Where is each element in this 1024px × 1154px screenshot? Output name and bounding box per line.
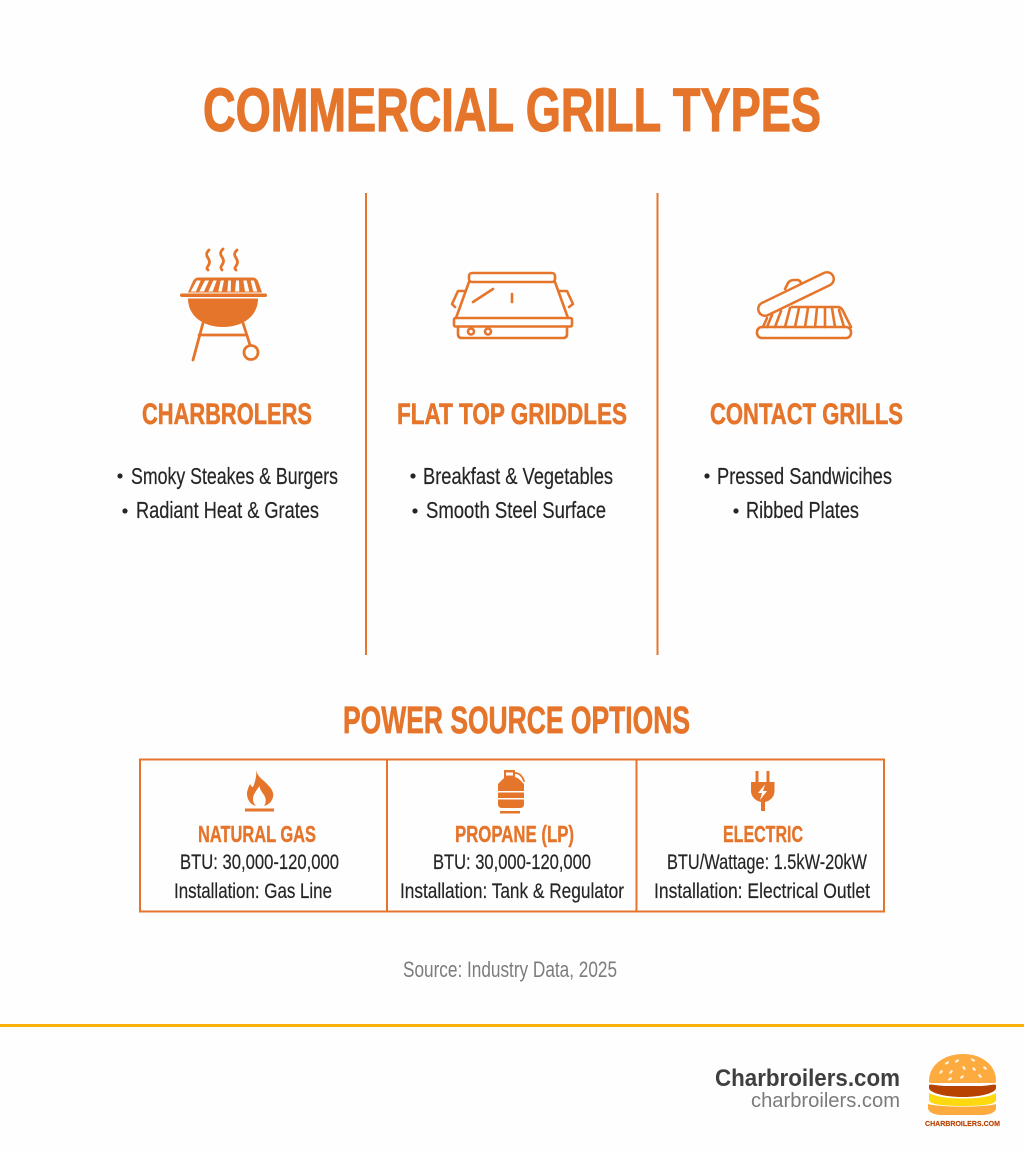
source note: Source: Industry Data, 2025: [403, 957, 617, 982]
brand name: Charbroilers.com: [715, 1065, 900, 1092]
features: contact grills: Pressed Sandwicihes: [717, 463, 892, 489]
heading: flat top griddles: FLAT TOP GRIDDLES: [397, 398, 627, 431]
label: propane: PROPANE (LP): [455, 821, 574, 847]
features: charbroilers: Radiant Heat & Grates: [136, 497, 319, 523]
features: flat top griddles: [410, 463, 613, 523]
details: propane: BTU: 30,000-120,000: [433, 850, 591, 874]
panel: charbroilers: [118, 249, 338, 523]
cell: electric: [654, 771, 870, 903]
features: contact grills: Ribbed Plates: [746, 497, 859, 523]
cell: propane: [400, 770, 624, 903]
icon: burger logo: CHARBROILERS.COM: [925, 1119, 1000, 1128]
details: natural gas: BTU: 30,000-120,000: [180, 850, 339, 874]
details: natural gas: Installation: Gas Line: [174, 879, 332, 903]
icon: plug: [751, 771, 774, 811]
features: flat top griddles: Smooth Steel Surface: [426, 497, 606, 523]
panel: flat top griddles: [397, 273, 627, 523]
heading: charbroilers: CHARBROLERS: [142, 398, 312, 431]
details: electric: BTU/Wattage: 1.5kW-20kW: [667, 850, 868, 874]
icon: flame: [245, 770, 274, 812]
panel: contact grills: [704, 279, 903, 523]
details: propane: [400, 850, 624, 903]
features: flat top griddles: Breakfast & Vegetables: [423, 463, 613, 489]
details: electric: [654, 850, 870, 903]
label: natural gas: NATURAL GAS: [198, 821, 316, 847]
features: contact grills: [704, 463, 892, 523]
label: electric: ELECTRIC: [723, 821, 803, 847]
details: natural gas: [174, 850, 339, 903]
details: propane: Installation: Tank & Regulator: [400, 879, 624, 903]
table: power sources: [140, 759, 884, 912]
cell: natural gas: [174, 770, 339, 903]
brand url: charbroilers.com: [751, 1089, 900, 1112]
title: COMMERCIAL GRILL TYPES: [203, 76, 821, 144]
footer: brand: [715, 1054, 1000, 1128]
heading: power source options: POWER SOURCE OPTIONS: [343, 700, 690, 742]
icon: griddle: [452, 273, 573, 338]
icon: charcoal grill: [180, 249, 267, 360]
features: charbroilers: [118, 463, 338, 523]
details: electric: Installation: Electrical Outlet: [654, 879, 870, 903]
icon: burger logo: [925, 1054, 1000, 1128]
icon: contact grill: [757, 279, 851, 338]
features: charbroilers: Smoky Steakes & Burgers: [131, 463, 338, 489]
icon: propane tank: [498, 770, 524, 814]
heading: contact grills: CONTACT GRILLS: [710, 398, 903, 431]
